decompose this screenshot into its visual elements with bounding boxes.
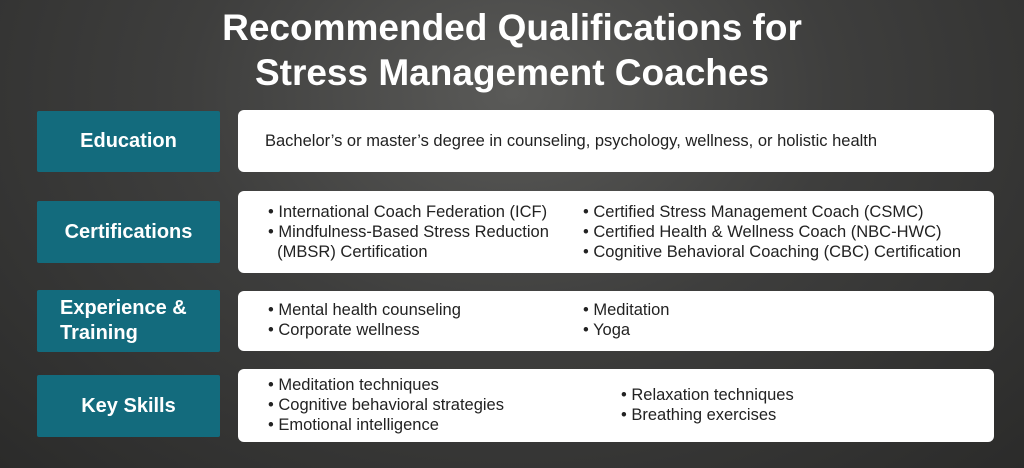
label: key skills bbox=[37, 375, 220, 437]
title: Stress Management Coaches bbox=[255, 52, 769, 93]
label: experience bbox=[37, 290, 220, 352]
panel: certifications: • International Coach Federation (ICF) bbox=[268, 203, 547, 221]
panel: certifications: (MBSR) Certification bbox=[277, 243, 428, 261]
panel: education bbox=[238, 110, 994, 172]
label: experience: Training bbox=[60, 322, 138, 344]
panel: key skills: • Breathing exercises bbox=[621, 406, 776, 424]
panel: experience bbox=[238, 291, 994, 351]
label: education: Education bbox=[80, 130, 177, 152]
panel: key skills: • Cognitive behavioral strategies bbox=[268, 396, 504, 414]
panel: experience: • Mental health counseling bbox=[268, 301, 461, 319]
label: certifications bbox=[37, 201, 220, 263]
panel: key skills: • Relaxation techniques bbox=[621, 386, 794, 404]
label: certifications: Certifications bbox=[65, 220, 192, 242]
title bbox=[222, 7, 802, 93]
panel: experience: • Yoga bbox=[583, 321, 630, 339]
panel: experience: • Corporate wellness bbox=[268, 321, 420, 339]
panel: certifications: • Certified Stress Management Coach (CSMC) bbox=[583, 203, 923, 221]
panel: key skills bbox=[238, 369, 994, 442]
label: key skills: Key Skills bbox=[81, 394, 176, 416]
panel: experience: • Meditation bbox=[583, 301, 670, 319]
panel: key skills: • Emotional intelligence bbox=[268, 416, 439, 434]
panel: certifications: • Cognitive Behavioral Coaching (CBC) Certification bbox=[583, 243, 961, 261]
label: experience: Experience & bbox=[60, 297, 187, 319]
panel: certifications: • Certified Health & Wellness Coach (NBC-HWC) bbox=[583, 223, 941, 241]
panel: key skills: • Meditation techniques bbox=[268, 376, 439, 394]
label: education bbox=[37, 111, 220, 172]
panel: certifications: • Mindfulness-Based Stress Reduction bbox=[268, 223, 549, 241]
panel: certifications bbox=[238, 191, 994, 273]
title: Recommended Qualifications for bbox=[222, 7, 802, 48]
panel: education: Bachelor’s or master’s degree in counseling, psychology, wellness, or holistic health bbox=[265, 132, 877, 150]
